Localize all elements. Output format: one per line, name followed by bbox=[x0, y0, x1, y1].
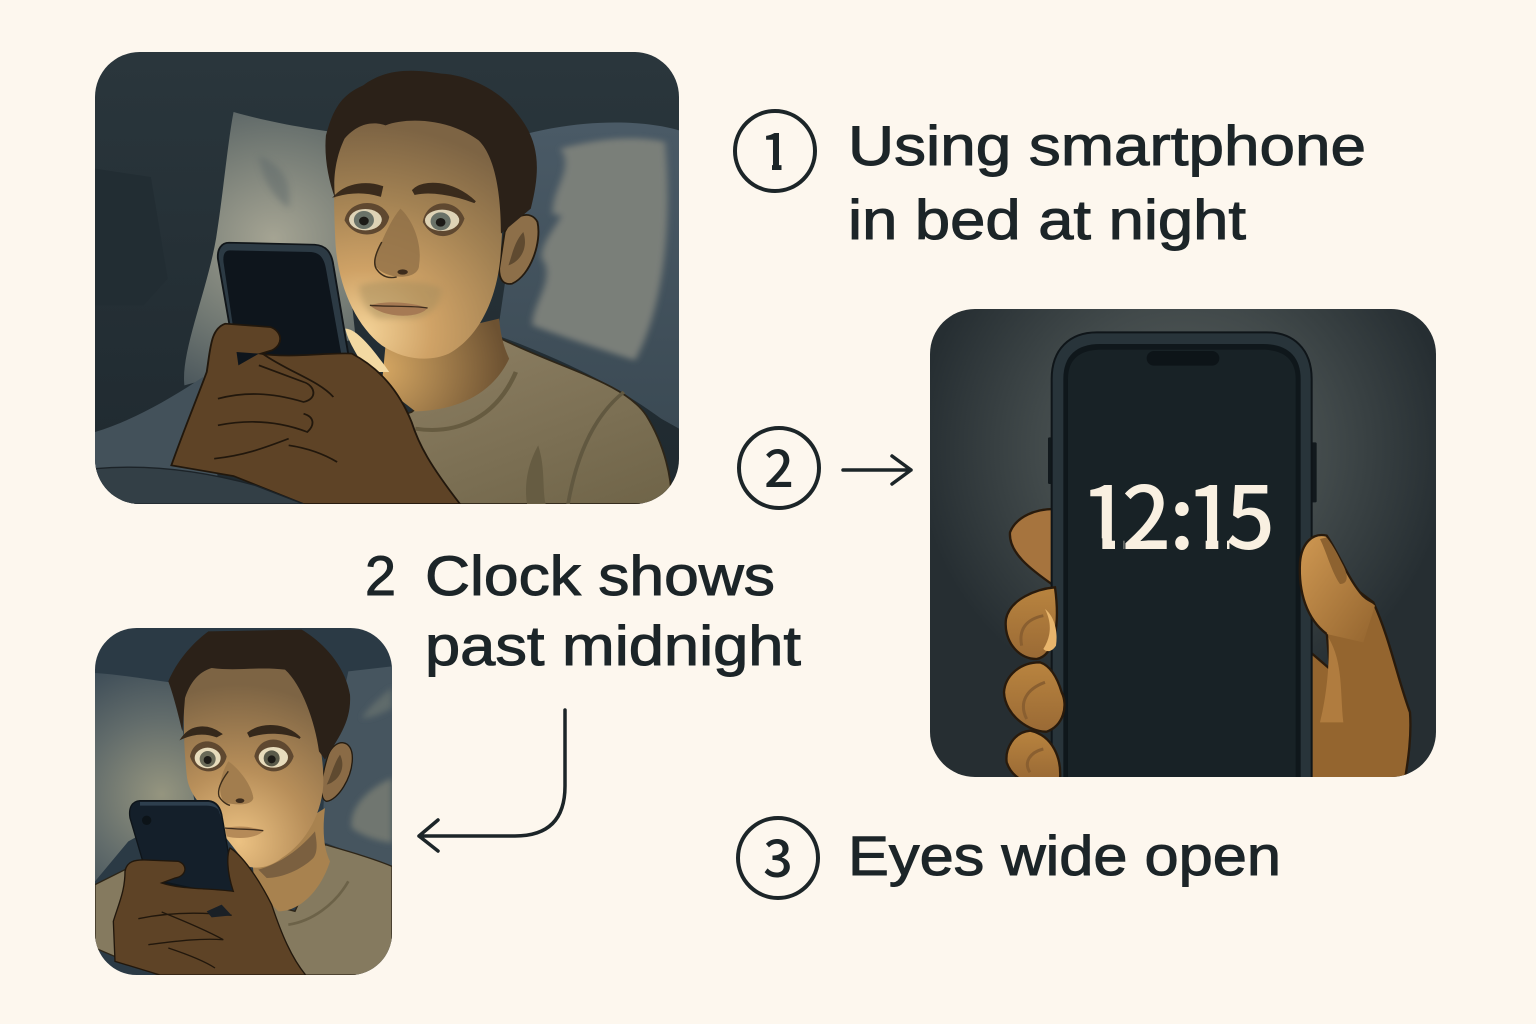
ear bbox=[322, 743, 352, 801]
shirt bbox=[408, 338, 672, 504]
panel: man using smartphone in bed bbox=[95, 52, 679, 504]
neck bbox=[382, 319, 509, 411]
finger creases bbox=[1021, 616, 1045, 772]
arrow: step 2 to clock panel bbox=[843, 456, 911, 484]
step 3 badge: 3 bbox=[763, 817, 793, 892]
step 2 label bbox=[365, 544, 801, 677]
step 2 badge: 2 bbox=[764, 427, 794, 502]
phone body bbox=[1048, 332, 1317, 779]
clock time bbox=[1090, 484, 1270, 550]
eyes bbox=[190, 739, 294, 771]
clock time: 12:15 bbox=[1080, 448, 1275, 574]
step 2 label: Clock shows bbox=[425, 544, 775, 607]
neck bbox=[252, 808, 330, 911]
hands bbox=[113, 848, 306, 975]
mouth bbox=[370, 302, 428, 316]
step 1 badge bbox=[735, 110, 815, 191]
bed sheet bbox=[95, 377, 222, 504]
left pillow bbox=[184, 112, 356, 385]
hair bbox=[168, 630, 350, 760]
phone bbox=[216, 242, 349, 355]
nose shadow bbox=[374, 209, 420, 277]
right thumb over phone bbox=[1300, 535, 1375, 642]
mouth bbox=[225, 827, 263, 838]
step 1 label: Using smartphone bbox=[848, 114, 1366, 177]
step 2 label: 2 bbox=[365, 544, 396, 607]
hands bbox=[171, 324, 460, 504]
step 3 badge bbox=[738, 817, 818, 898]
eyebrows bbox=[336, 184, 382, 195]
face bbox=[184, 654, 323, 868]
eyebrows bbox=[182, 727, 221, 738]
arrow: curved to lower portrait bbox=[419, 710, 565, 851]
left fingers over phone bbox=[1004, 587, 1065, 779]
blanket bbox=[95, 467, 304, 504]
right pillow bbox=[497, 123, 679, 429]
glow on thumb bbox=[345, 329, 389, 372]
step 2 label: past midnight bbox=[425, 614, 801, 677]
panel: phone clock showing 12:15 bbox=[930, 309, 1436, 779]
upper lip shading bbox=[359, 281, 441, 319]
step 1 badge: 1 bbox=[760, 110, 790, 185]
nose bbox=[220, 761, 253, 804]
step 1 label bbox=[848, 114, 1366, 251]
step 1 label: in bed at night bbox=[848, 188, 1246, 251]
pillow bbox=[95, 673, 195, 881]
step 3 label: Eyes wide open bbox=[848, 824, 1281, 887]
top finger behind phone bbox=[1010, 509, 1054, 586]
eyes bbox=[345, 203, 464, 236]
face bbox=[334, 109, 502, 359]
shirt bbox=[95, 845, 392, 975]
right hand behind phone bbox=[1307, 592, 1410, 779]
ear bbox=[499, 215, 538, 284]
panel: close-up of man with eyes wide open bbox=[95, 628, 392, 975]
step 2 badge bbox=[739, 427, 819, 508]
phone bbox=[128, 800, 232, 890]
hair bbox=[325, 71, 537, 234]
